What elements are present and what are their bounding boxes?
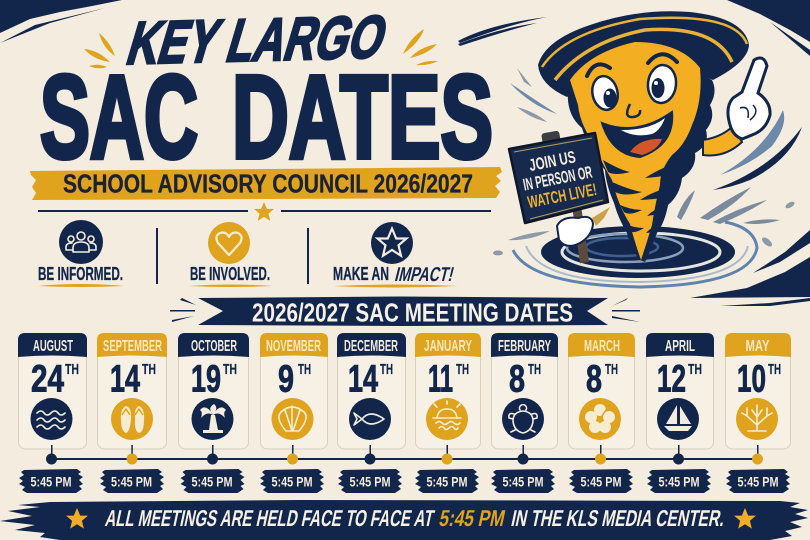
card: December: DECEMBER (344, 338, 398, 355)
card: May: 10 (737, 358, 766, 400)
vertical divider (307, 228, 309, 284)
section heading: meeting dates: 2026/2027 SAC MEETING DATES (252, 298, 573, 328)
divider with star (38, 202, 491, 221)
card: September (97, 333, 167, 493)
card: February: 5:45 PM (502, 474, 544, 490)
card: November: 5:45 PM (272, 474, 312, 490)
card: May: 5:45 PM (738, 474, 778, 490)
card: November (260, 333, 328, 493)
pillar: make an impact (333, 222, 458, 288)
card: May: MAY (746, 338, 770, 355)
brush stroke: top left (0, 0, 122, 43)
card: November: 9 (278, 358, 294, 400)
card: September: 14 (110, 358, 140, 400)
bottom banner (0, 500, 808, 540)
card: October: TH (223, 361, 237, 378)
bottom banner: ALL MEETINGS ARE HELD FACE TO FACE AT (103, 505, 437, 531)
card: March: TH (605, 361, 618, 378)
card: August: 5:45 PM (30, 474, 72, 490)
card: October: 5:45 PM (192, 474, 232, 490)
card: January: 11 (428, 358, 453, 400)
mascot: sign with message (509, 131, 610, 263)
mascot: sign with message: WATCH LIVE! (526, 180, 598, 212)
pillar: be involved: BE INVOLVED. (190, 264, 270, 284)
card: January: TH (456, 361, 469, 378)
card: October: 19 (191, 358, 221, 400)
card: October: OCTOBER (191, 338, 237, 355)
card: August: AUGUST (33, 338, 73, 355)
card: January (415, 333, 481, 493)
card: April: 12 (657, 358, 686, 400)
subtitle band: SCHOOL ADVISORY COUNCIL 2026/2027 (63, 168, 473, 198)
pillar: make an impact: MAKE AN (333, 264, 389, 284)
card: April (646, 333, 714, 493)
card: March: 5:45 PM (580, 474, 622, 490)
card: February: FEBRUARY (498, 338, 551, 355)
card: April: APRIL (665, 338, 695, 355)
mascot: tornado body and hat (538, 11, 749, 262)
bottom banner: 5:45 PM (437, 505, 508, 531)
card: November: NOVEMBER (266, 338, 321, 355)
card: March: MARCH (584, 338, 620, 355)
card: December: 5:45 PM (350, 474, 390, 490)
card: December (337, 333, 406, 493)
mascot: face (587, 54, 678, 157)
card: February: 8 (509, 358, 525, 400)
accent sparks right (403, 29, 438, 65)
title: Key Largo: KEY LARGO (120, 3, 395, 78)
card: August: TH (65, 361, 79, 378)
brush strokes: right side swooshes (458, 0, 810, 306)
card: September: SEPTEMBER (103, 338, 162, 355)
card: January: JANUARY (424, 338, 472, 355)
accent sparks left (84, 33, 115, 68)
pillar: be informed: BE INFORMED. (38, 264, 123, 284)
mascot: sign with message: IN PERSON OR (522, 163, 594, 195)
pillar: be involved (188, 222, 272, 287)
card: March (568, 333, 635, 493)
card: September: 5:45 PM (111, 474, 152, 490)
card: May: TH (768, 361, 781, 378)
card: February: TH (528, 361, 541, 378)
pillar: make an impact: IMPACT! (393, 264, 456, 286)
card: February (491, 333, 558, 493)
card: December: TH (380, 361, 393, 378)
mascot: pointing arm and glove (703, 58, 802, 190)
card: May (725, 333, 791, 493)
title: SAC DATES: DATES (232, 52, 493, 184)
card: November: TH (298, 361, 311, 378)
card: January: 5:45 PM (426, 474, 468, 490)
card: August (18, 333, 87, 493)
card: December: 14 (348, 358, 378, 400)
timeline line (52, 458, 758, 460)
card: March: 8 (586, 358, 602, 400)
card: October (178, 333, 249, 493)
title: SAC DATES: SAC (40, 52, 198, 184)
pillar: be informed (38, 220, 124, 287)
card: September: TH (142, 361, 156, 378)
vertical divider (156, 228, 158, 284)
mascot: whirlpool and splashes (493, 68, 796, 287)
card: April: 5:45 PM (658, 474, 700, 490)
card: August: 24 (31, 358, 64, 400)
card: April: TH (688, 361, 702, 378)
title: SAC DATES (40, 52, 493, 184)
mascot: sign with message: JOIN US (527, 147, 577, 175)
